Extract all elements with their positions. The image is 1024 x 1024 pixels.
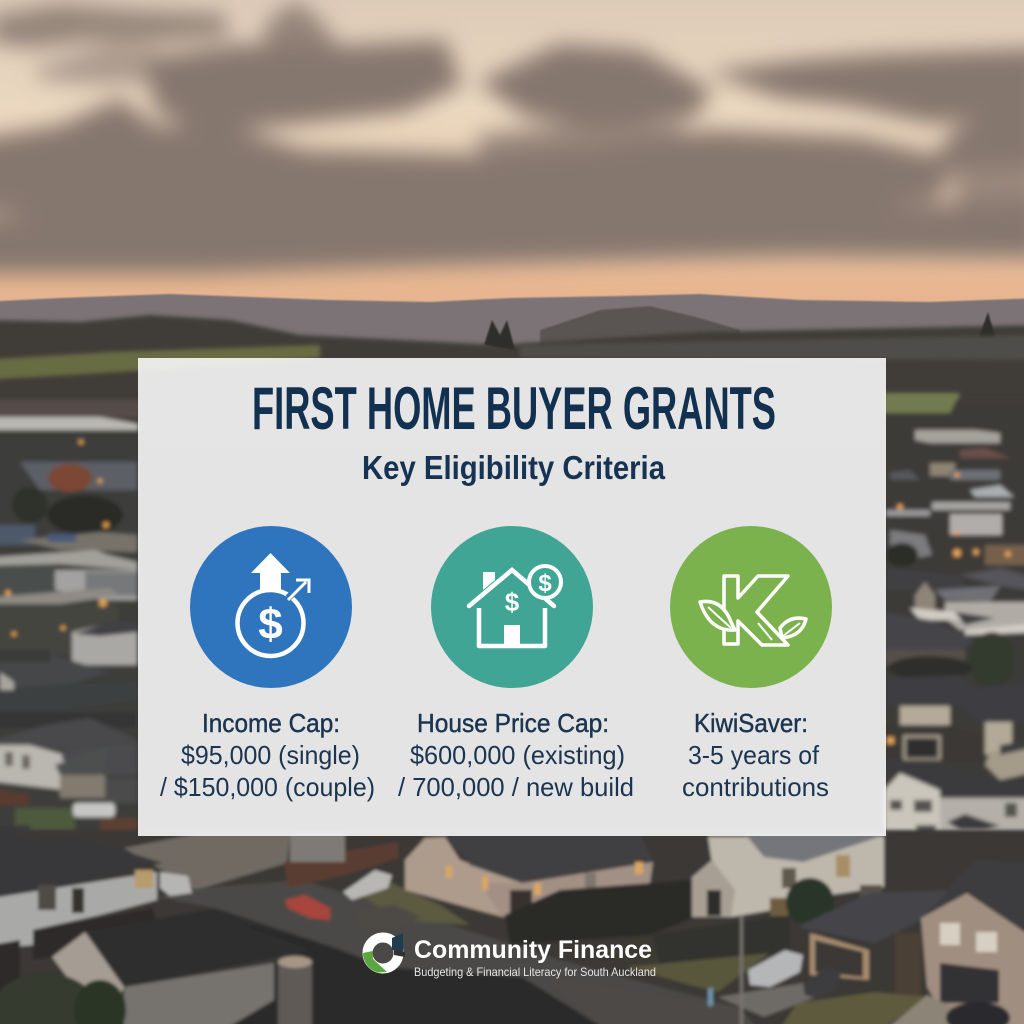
icon: house price cap: $ [538,570,552,597]
subtitle: Key Eligibility Criteria [362,449,666,486]
icon: income cap [190,526,352,688]
column: house price cap text [398,708,634,802]
column: KiwiSaver text [682,708,829,802]
icon: house price cap: $ [505,587,520,617]
column: KiwiSaver text: 3-5 years of [688,740,820,770]
background photo: suburb houses right [884,393,1024,842]
column: income cap text: / $150,000 (couple) [160,772,375,802]
column: house price cap text: $600,000 (existing) [410,740,625,770]
column: income cap text: $95,000 (single) [181,740,360,770]
column: KiwiSaver text: KiwiSaver: [694,708,808,738]
background photo: sunset sky with clouds [0,0,1024,310]
column: income cap text: Income Cap: [202,708,340,738]
translucent content panel [138,358,886,836]
logo: Community Finance: Community Finance [414,936,652,964]
background photo: suburb houses left [0,400,140,840]
logo: Community Finance: Budgeting & Financial Literacy for South Auckland [414,965,656,979]
icon: income cap: $ [258,600,283,649]
column: income cap text [160,708,375,802]
column: KiwiSaver text: contributions [682,772,829,802]
column: house price cap text: / 700,000 / new build [398,772,634,802]
background photo: midground fields and trees [0,312,1024,440]
background photo: street and houses foreground [0,825,1024,1024]
logo: Community Finance [363,933,656,979]
icon: house price cap [431,526,593,688]
column: house price cap text: House Price Cap: [417,708,609,738]
background photo: distant hills [0,294,1024,350]
icon: KiwiSaver [670,526,832,688]
